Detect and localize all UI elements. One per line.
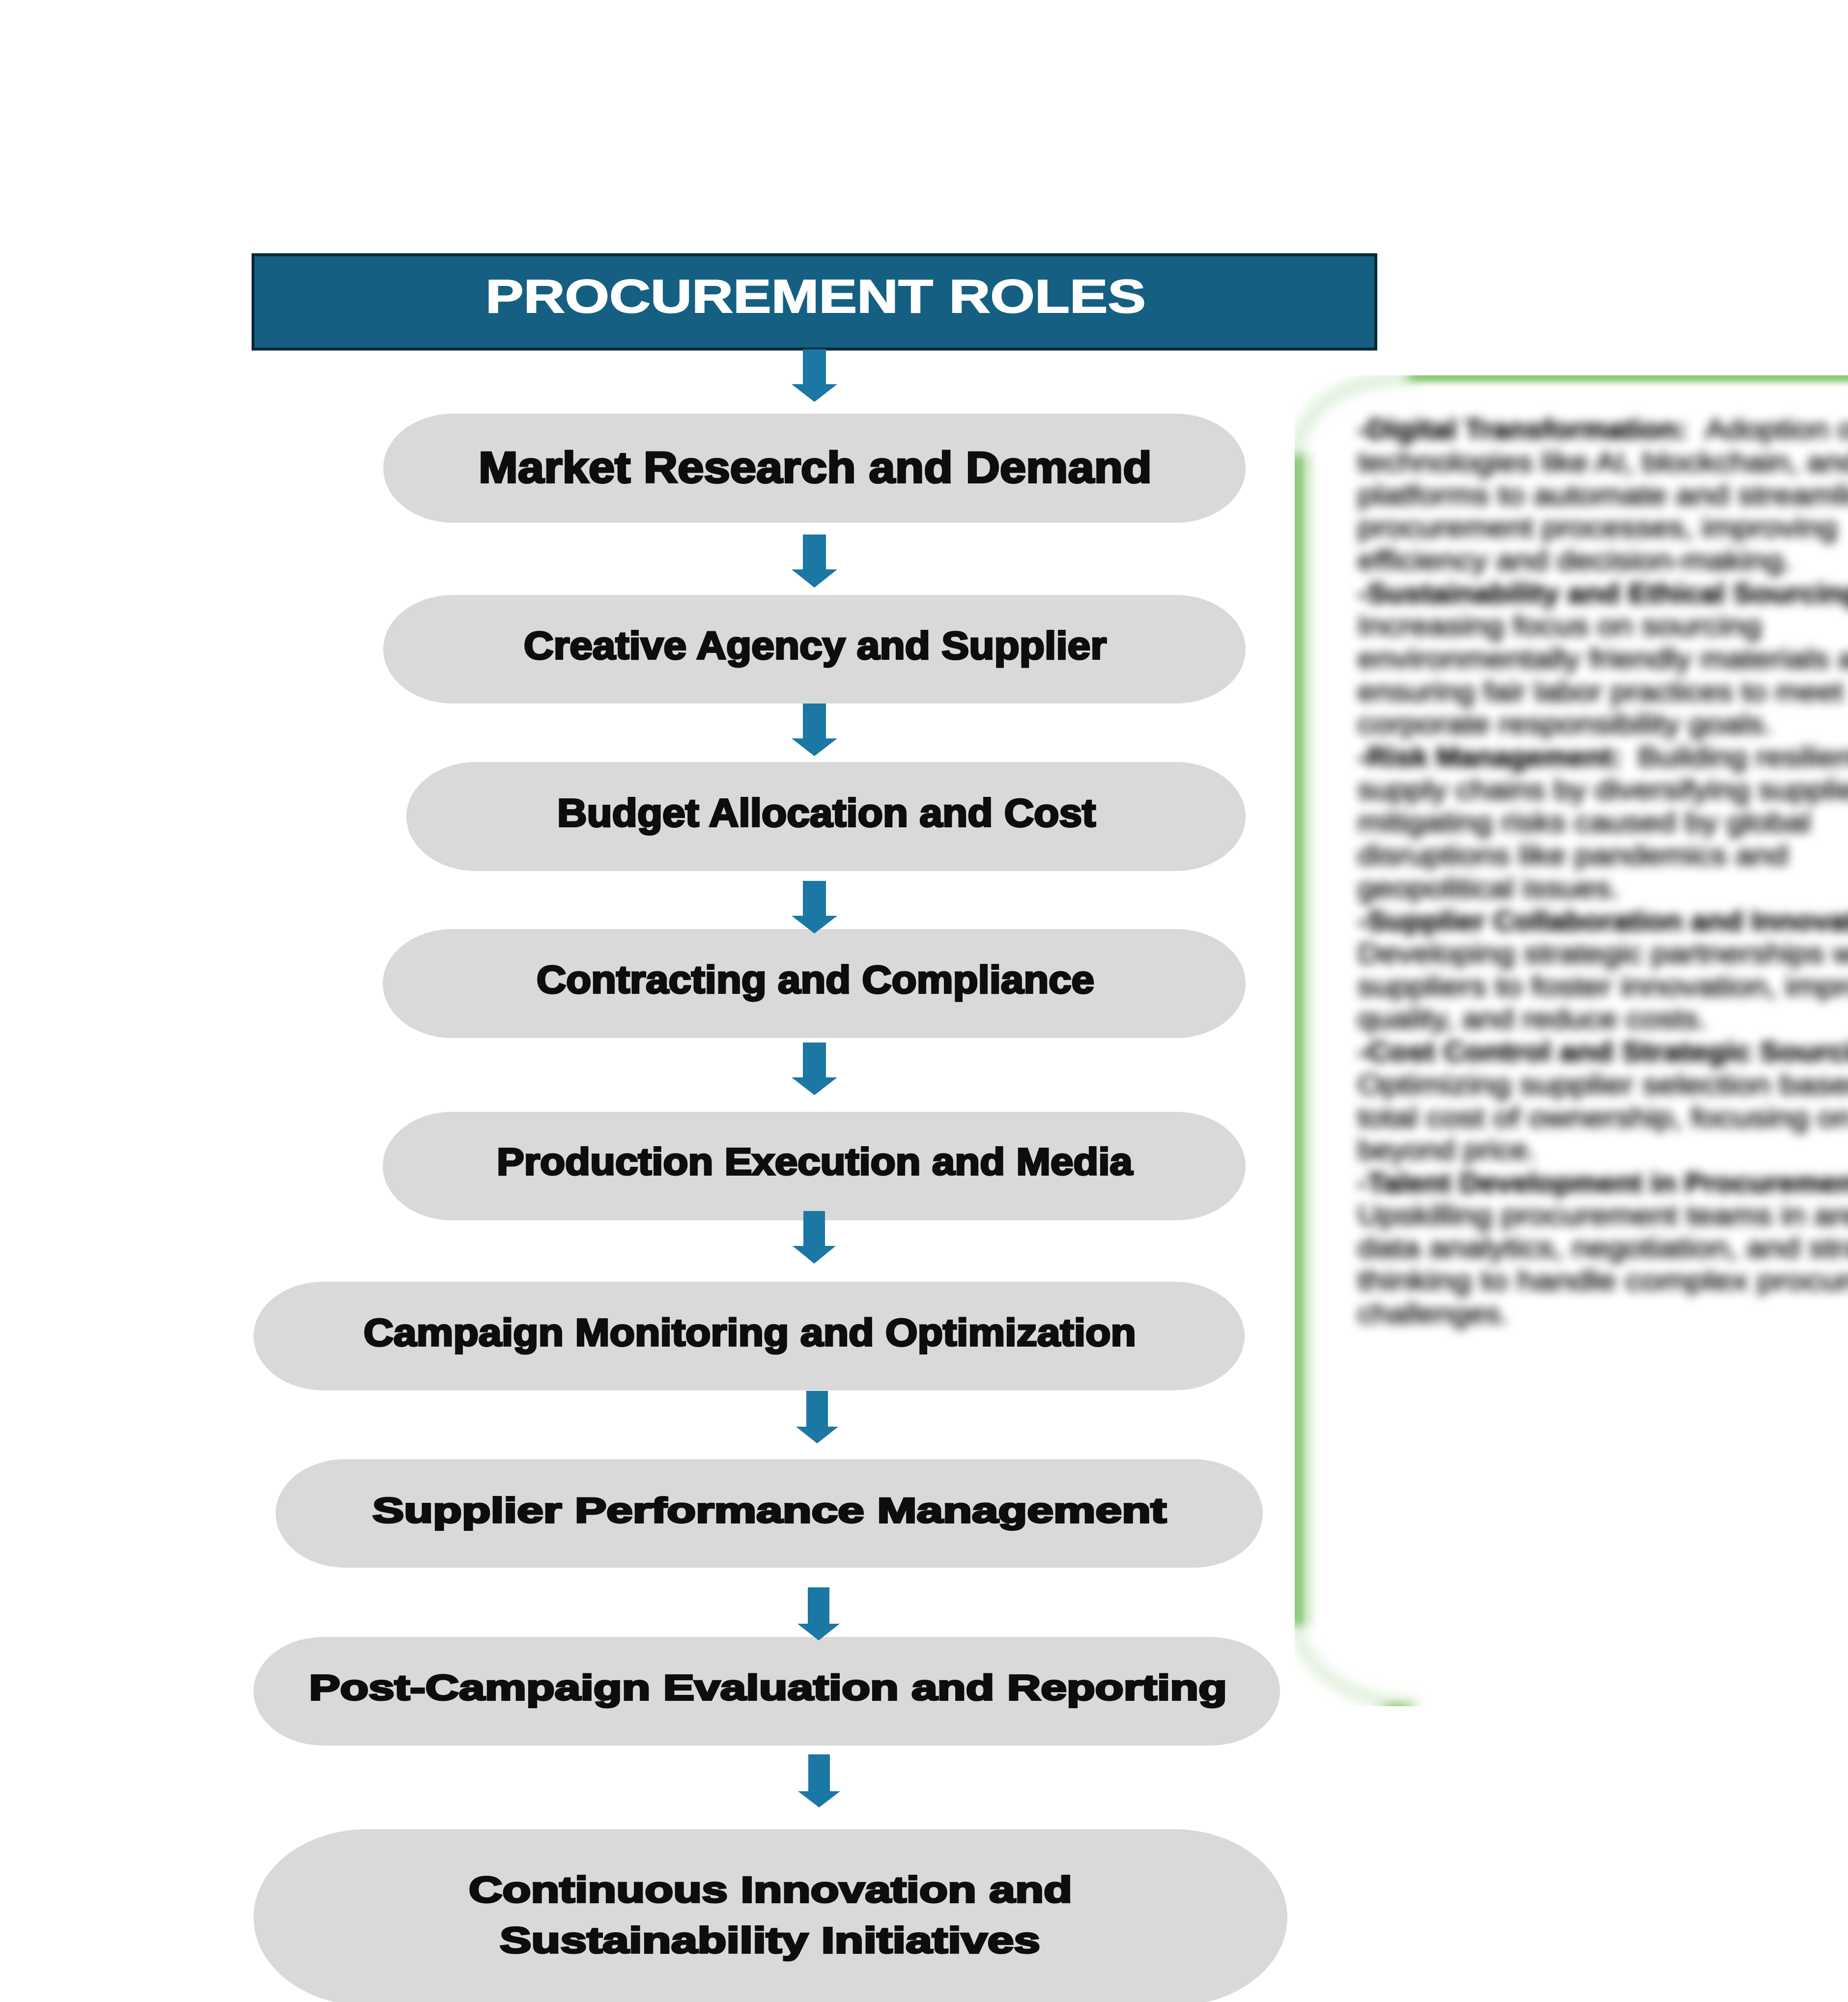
step 9: continuous innovation: Continuous Innovation and [469, 1869, 1072, 1910]
text block: blurred trends list: Adoption of [1705, 414, 1848, 445]
text block: blurred trends list: quality, and reduce costs. [1358, 1003, 1707, 1035]
text block: blurred trends list: disruptions like pandemics and [1358, 840, 1788, 871]
text block: blurred trends list: -Risk Management: [1358, 741, 1621, 773]
text block: blurred trends list: Developing strategic partnerships with [1358, 938, 1848, 969]
text block: blurred trends list: -Talent Development in Procurement: [1358, 1167, 1848, 1199]
text block: blurred trends list: Increasing focus on sourcing [1358, 610, 1762, 642]
text block: blurred trends list: ensuring fair labor practices to meet [1358, 676, 1843, 707]
text block: blurred trends list: environmentally friendly materials and [1358, 643, 1848, 675]
text block: blurred trends list: platforms to automate and streamline [1358, 479, 1848, 511]
step 8: post-campaign evaluation: Post-Campaign Evaluation and Reporting [309, 1668, 1227, 1708]
title banner [253, 254, 1376, 349]
step 3: budget allocation: Budget Allocation and Cost [557, 791, 1096, 835]
arrow 4 [792, 881, 837, 933]
title text: PROCUREMENT ROLES [485, 270, 1146, 323]
text block: blurred trends list: supply chains by diversifying suppliers, [1358, 774, 1848, 806]
text block: blurred trends list: thinking to handle complex procurement [1358, 1265, 1848, 1297]
arrow 2 [792, 535, 837, 588]
step 1: market research [383, 414, 1246, 523]
text block: blurred trends list: beyond price. [1358, 1134, 1536, 1166]
step 4: contracting: Contracting and Compliance [537, 958, 1094, 1001]
step 5: production execution [383, 1112, 1246, 1220]
text block: blurred trends list: geopolitical issues. [1358, 873, 1620, 904]
step 7: supplier performance: Supplier Performance Management [372, 1492, 1166, 1530]
step 4: contracting [383, 929, 1246, 1038]
text block: blurred trends list: data analytics, negotiation, and strategic [1358, 1232, 1848, 1264]
text block: blurred trends list: Building resilient [1638, 741, 1848, 773]
step 9: continuous innovation [254, 1829, 1287, 2002]
text block: blurred trends list: technologies like AI, blockchain, and [1358, 447, 1848, 478]
text block: blurred trends list: efficiency and decision-making. [1358, 545, 1792, 576]
text block: blurred trends list: challenges. [1358, 1298, 1508, 1329]
panel: blurred trends side panel border [1295, 375, 1848, 1706]
step 7: supplier performance [276, 1459, 1263, 1568]
text block: blurred trends list: -Sustainability and Ethical Sourcing: [1358, 578, 1848, 609]
arrow 9 [798, 1754, 840, 1807]
step 9: continuous innovation: Sustainability Initiatives [500, 1920, 1040, 1961]
step 3: budget allocation [406, 762, 1246, 871]
text block: blurred trends list: -Cost Control and Strategic Sourcing: [1358, 1036, 1848, 1068]
step 8: post-campaign evaluation [254, 1637, 1280, 1746]
step 5: production execution: Production Execution and Media [497, 1141, 1133, 1183]
text block: blurred trends list: mitigating risks caused by global [1358, 807, 1811, 838]
text block: blurred trends list: procurement processes, improving [1358, 512, 1837, 543]
arrow 7 [796, 1391, 838, 1443]
arrow 6 [793, 1211, 836, 1264]
text block: blurred trends list: Optimizing supplier selection based on [1358, 1069, 1848, 1100]
step 2: creative agency [383, 595, 1246, 704]
arrow 1 [792, 349, 837, 402]
arrow 3 [792, 704, 837, 756]
step 6: campaign monitoring: Campaign Monitoring and Optimization [364, 1311, 1136, 1354]
step 2: creative agency: Creative Agency and Supplier [524, 623, 1107, 667]
text block: blurred trends list: suppliers to foster innovation, improve [1358, 971, 1848, 1002]
step 6: campaign monitoring [254, 1282, 1245, 1390]
text block: blurred trends list: corporate responsibility goals. [1358, 708, 1772, 740]
arrow 8 [797, 1587, 840, 1640]
text block: blurred trends list: -Digital Transformation: [1358, 414, 1687, 445]
text block: blurred trends list [1358, 414, 1848, 1329]
step 1: market research: Market Research and Demand [479, 443, 1152, 492]
arrow 5 [792, 1043, 837, 1095]
